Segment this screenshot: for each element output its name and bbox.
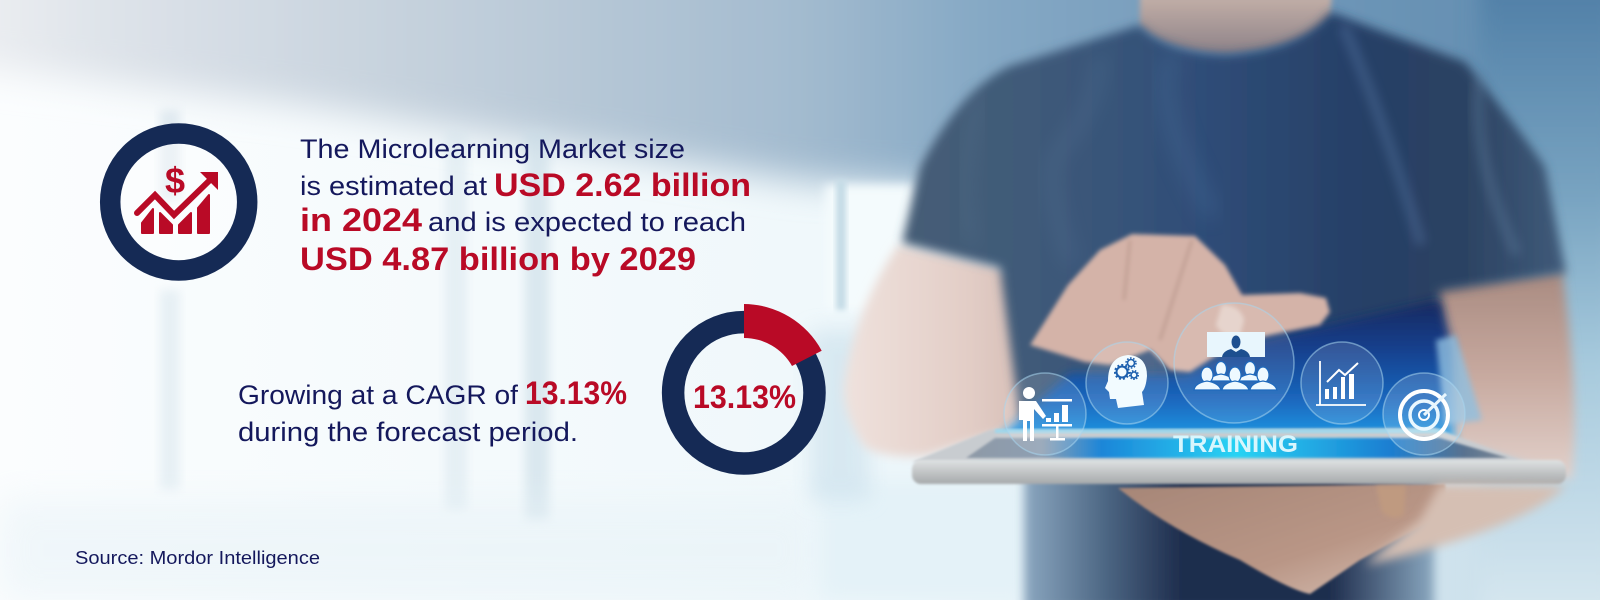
icon: target (1383, 373, 1465, 455)
donut highlighted segment (744, 304, 822, 366)
shirt folds (964, 30, 1515, 340)
pointing hand (1030, 234, 1330, 372)
pale window beside torso (1436, 335, 1482, 425)
text block: market size: in 2024 (300, 202, 422, 238)
text block: market size (300, 134, 751, 277)
training label: TRAINING (1173, 431, 1298, 458)
icon: training group (1174, 303, 1294, 423)
left arm (844, 245, 1095, 456)
icon: presenter (1004, 373, 1086, 455)
forearm right (1365, 484, 1566, 565)
hologram icons (1004, 303, 1465, 455)
right arm (1430, 270, 1574, 480)
text block: market size: is estimated at (300, 171, 488, 201)
icon: rising arrow (137, 172, 218, 233)
text block: CAGR (238, 375, 627, 447)
icon: growth chart (1301, 342, 1383, 424)
text block: market size: and is expected to reach (428, 207, 746, 237)
text block: market size: The Microlearning Market size (300, 134, 685, 164)
text block: CAGR: Growing at a CAGR of (238, 380, 519, 410)
neck (1140, 0, 1332, 54)
text block: market size: USD 4.87 billion by 2029 (300, 241, 696, 277)
donut chart: CAGR (673, 304, 822, 463)
shirt (902, 12, 1566, 420)
source: Source: Mordor Intelligence (75, 548, 320, 568)
lower torso (1024, 470, 1434, 600)
donut value: 13.13% (693, 379, 796, 415)
text block: CAGR: 13.13% (525, 375, 627, 411)
blue hologram glow (970, 300, 1455, 460)
icon: head with gears (1086, 342, 1168, 424)
thumb (1376, 486, 1406, 518)
photo: person holding tablet (844, 0, 1574, 600)
text block: CAGR: during the forecast period. (238, 417, 578, 447)
text block: market size: USD 2.62 billion (494, 167, 751, 203)
icon: market growth ring (110, 134, 247, 270)
hand under tablet (1118, 484, 1446, 594)
icon: dollar sign: $ (165, 160, 185, 201)
tablet (912, 428, 1566, 484)
